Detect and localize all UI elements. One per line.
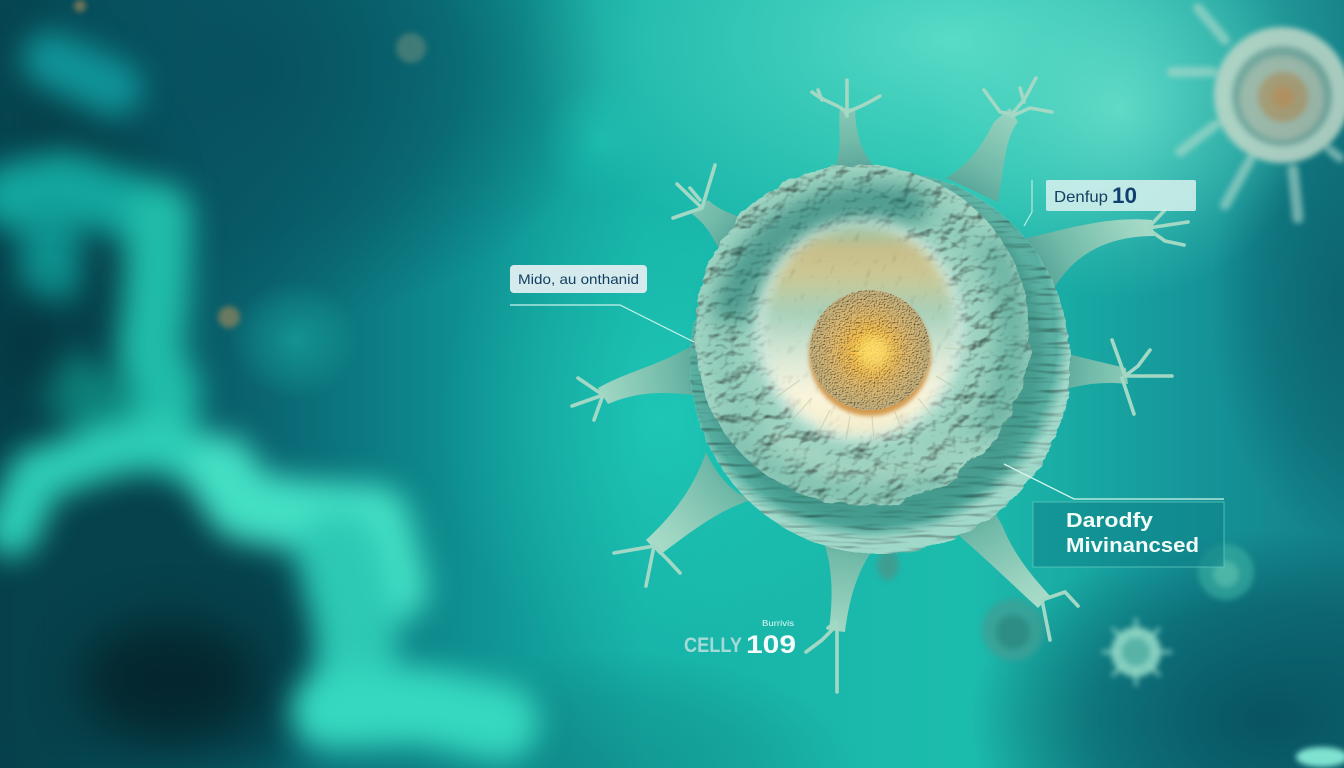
rim shading: [720, 203, 1014, 496]
cell arms: [572, 78, 1188, 692]
callout: lower right label: Mivinancsed: [1066, 535, 1199, 557]
blurred cell: top right: [1172, 8, 1344, 218]
callout: bottom value: CELLY: [684, 634, 742, 657]
callout: bottom value: Burrivis: [762, 619, 794, 628]
small blurred cells: lower right: [877, 544, 1344, 767]
cell body: [690, 170, 1070, 554]
callout: bottom value: 109: [746, 631, 796, 659]
out-of-focus particles: [74, 0, 426, 328]
main cell: [572, 78, 1188, 692]
callout: top right label: Denfup: [1054, 189, 1108, 206]
nucleus: [809, 290, 931, 416]
callout: bottom value: [684, 619, 796, 659]
callout: top right label: 10: [1112, 183, 1137, 208]
callout: lower right label: Darodfy: [1066, 510, 1154, 532]
crater rim: [694, 165, 1030, 505]
callout: top right label: [1024, 180, 1196, 226]
callout: left label: Mido, au onthanid: [518, 271, 639, 287]
rim shadow: [700, 178, 1044, 526]
callout: left label: [510, 265, 694, 342]
inner crater: [760, 222, 960, 438]
blurred foreground cell mass at left: [0, 0, 500, 768]
callout: lower right label: [1004, 464, 1224, 567]
crater radial ridges: [775, 348, 970, 440]
